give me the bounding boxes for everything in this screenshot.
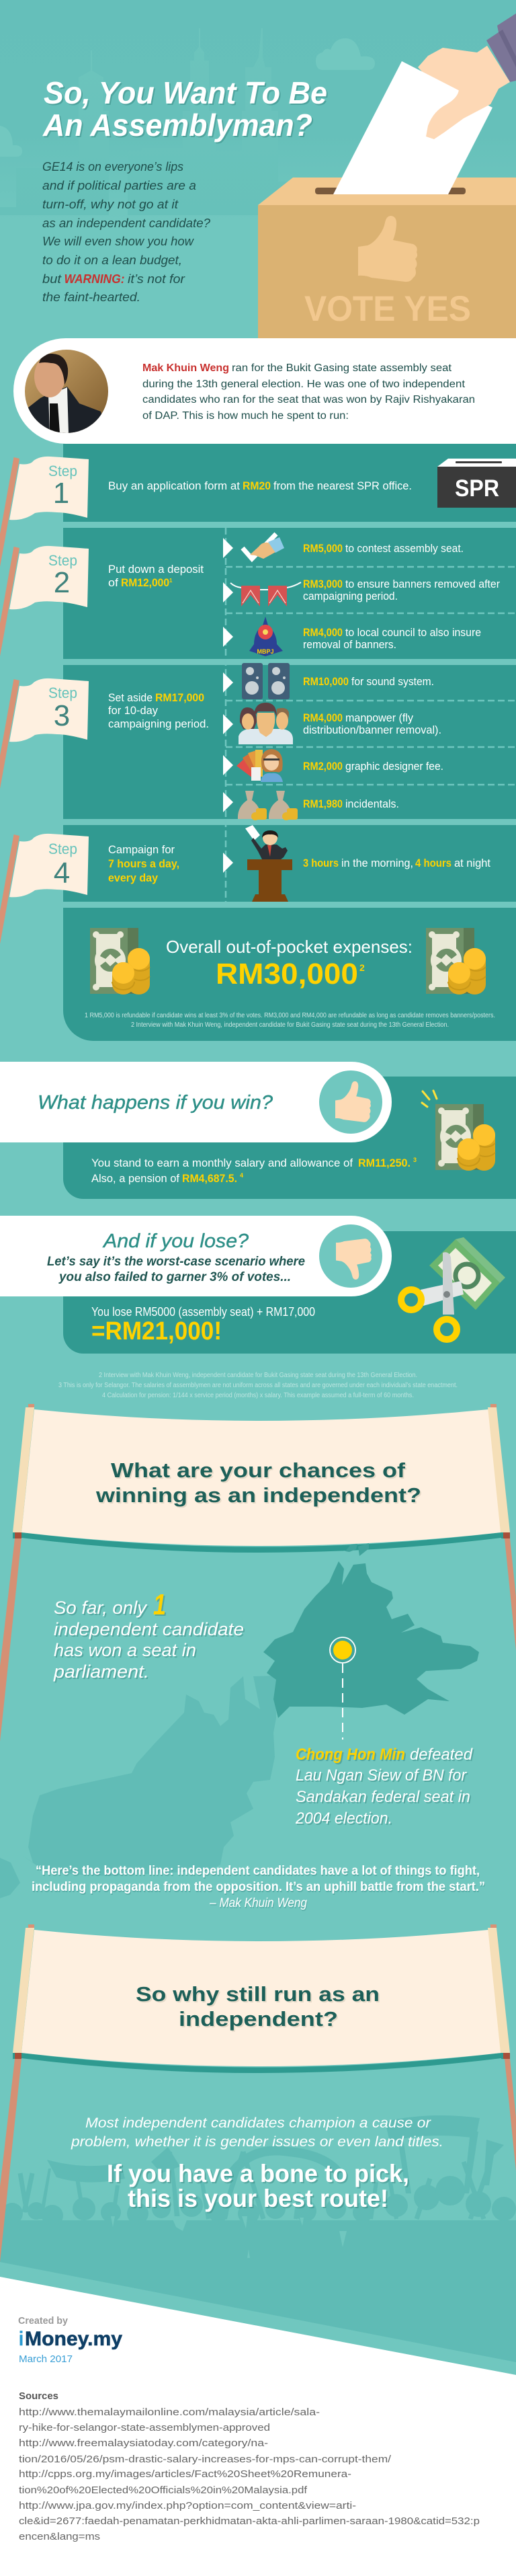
icon: money and coins right bbox=[426, 928, 486, 994]
text: bone to pick: this is your best route! bbox=[128, 2185, 388, 2212]
lose heading: And if you lose? bbox=[102, 1231, 249, 1252]
win text bbox=[91, 1157, 417, 1185]
text: Chong Hon Min: defeated bbox=[410, 1746, 473, 1764]
icon: SPR ballot box: SPR bbox=[455, 475, 499, 502]
flag: step 2 bbox=[0, 546, 89, 656]
win text: RM4,687.5. bbox=[182, 1173, 237, 1185]
heading: why still run: independent? bbox=[179, 2007, 338, 2031]
text: champion a cause: Most independent candidates champion a cause or bbox=[85, 2115, 431, 2131]
step 4 text: every day bbox=[108, 871, 159, 884]
text: RM3,000: to ensure banners removed after bbox=[345, 578, 500, 590]
sources: http://cpps.org.my/images/articles/Fact%20Sheet%20Remunera- bbox=[19, 2468, 351, 2480]
candidate description bbox=[142, 362, 475, 422]
logo: iMoney.my: i bbox=[19, 2328, 24, 2350]
banner: why still run bbox=[0, 1924, 516, 2262]
text: RM4,000 manpower: manpower (fly bbox=[345, 711, 413, 724]
candidate photo bbox=[25, 350, 109, 437]
text: Chong Hon Min bbox=[295, 1746, 473, 1828]
sources: Sources bbox=[19, 2390, 58, 2402]
lose subheading: Let’s say it’s the worst-case scenario where bbox=[47, 1255, 305, 1269]
quote: “Here’s the bottom line: independent candidates have a lot of things to fight, bbox=[36, 1864, 480, 1878]
step 4 detail bbox=[303, 857, 490, 869]
intro paragraph: turn-off, why not go at it bbox=[42, 198, 179, 211]
text: RM3,000 bbox=[303, 578, 500, 602]
step 4 detail: in the morning, bbox=[341, 857, 413, 869]
map: west Malaysia bbox=[0, 1676, 276, 1898]
lose amount text: You lose RM5000 (assembly seat) + RM17,000 bbox=[91, 1305, 315, 1319]
icon: scissors cutting money bbox=[401, 1237, 505, 1339]
candidate description: during the 13th general election. He was one of two independent bbox=[142, 379, 466, 390]
step 2 text: of bbox=[108, 576, 118, 589]
panel: step 1 bbox=[63, 444, 516, 522]
flag: step 3 bbox=[0, 678, 89, 789]
flag: step 3: 3 bbox=[54, 699, 70, 732]
icon: thumbs up on box bbox=[358, 216, 417, 282]
banner: chances of winning bbox=[0, 1404, 516, 1742]
text: RM10,000: RM10,000 bbox=[303, 675, 349, 688]
text: only one independent: 1 bbox=[153, 1588, 166, 1621]
win text: You stand to earn a monthly salary and allowance of bbox=[91, 1157, 353, 1169]
text: Chong Hon Min: Lau Ngan Siew of BN for bbox=[296, 1766, 467, 1785]
step 2 text: 1 bbox=[169, 578, 173, 584]
footnotes bbox=[85, 1012, 495, 1029]
text: RM4,000 council: RM4,000 bbox=[303, 626, 343, 639]
intro paragraph: to do it on a lean budget, bbox=[42, 253, 182, 267]
credit block bbox=[18, 2315, 122, 2365]
text: Chong Hon Min: 2004 election. bbox=[295, 1809, 392, 1828]
lose pill bbox=[0, 1216, 392, 1296]
text: Chong Hon Min: Sandakan federal seat in bbox=[296, 1788, 470, 1806]
quote: including propaganda from the opposition. It’s an uphill battle from the start.” bbox=[32, 1880, 485, 1894]
sources: http://www.jpa.gov.my/index.php?option=com_content&view=arti- bbox=[19, 2500, 356, 2511]
map: east Malaysia bbox=[263, 1543, 479, 1718]
lose subheading: you also failed to garner 3% of votes... bbox=[58, 1270, 291, 1284]
text: RM1,980: RM1,980 bbox=[303, 797, 343, 810]
icon: bunting bbox=[230, 582, 301, 607]
cloud right bbox=[316, 38, 375, 70]
text: bone to pick bbox=[107, 2160, 409, 2212]
quote bbox=[32, 1864, 485, 1910]
panel: step 3 bbox=[63, 665, 516, 819]
text: only one independent: So far, only bbox=[54, 1598, 148, 1618]
sources: http://www.freemalaysiatoday.com/category/na- bbox=[19, 2437, 268, 2449]
flag: step 1 bbox=[0, 457, 89, 567]
text: RM1,980 bbox=[303, 797, 399, 810]
text: RM10,000: for sound system. bbox=[351, 675, 434, 688]
lose amount text bbox=[91, 1305, 315, 1345]
intro paragraph: as an independent candidate? bbox=[42, 217, 210, 230]
sources: tion/2016/05/26/psm-drastic-salary-increases-for-mps-can-corrupt-them/ bbox=[19, 2454, 392, 2465]
box top face bbox=[258, 178, 516, 205]
map pin with dashed line bbox=[330, 1637, 355, 1740]
text: RM3,000: campaigning period. bbox=[303, 590, 398, 602]
step flags bbox=[0, 457, 89, 944]
text: RM3,000: RM3,000 bbox=[303, 578, 343, 590]
footnotes 2-4: 3 This is only for Selangor. The salaries of assemblymen are not uniform across all states and are governed under each individual’s state enactment. bbox=[58, 1382, 458, 1389]
icon: candidate at podium bbox=[245, 825, 292, 902]
flag: step 3: Step bbox=[48, 685, 77, 701]
icon: sleeve cuff bbox=[486, 13, 516, 82]
icon: thumb bbox=[426, 74, 499, 139]
intro paragraph: it’s not for bbox=[128, 272, 185, 286]
flag: step 4: Step bbox=[48, 841, 77, 857]
vote yes label: VOTE YES bbox=[304, 289, 471, 329]
intro paragraph: but bbox=[42, 272, 62, 286]
sources: ry-hike-for-selangor-state-assemblymen-approved bbox=[19, 2422, 270, 2433]
heading: why still run: So why still run as an bbox=[136, 1982, 380, 2006]
text: only one independent bbox=[53, 1588, 244, 1682]
panel: if you lose bbox=[0, 1216, 516, 1354]
text: Chong Hon Min: Chong Hon Min bbox=[296, 1746, 405, 1764]
text: RM5,000: RM5,000 bbox=[303, 542, 343, 555]
lose amount text: =RM21,000! bbox=[91, 1317, 222, 1345]
flag: step 4: 4 bbox=[54, 857, 70, 890]
step 4 detail: 3 hours bbox=[303, 857, 339, 869]
panel: step 4 bbox=[63, 825, 516, 902]
icon: money win bbox=[422, 1091, 495, 1171]
dashed dividers bbox=[226, 528, 516, 902]
date: March 2017 bbox=[19, 2353, 73, 2365]
text: RM4,000 council: to local council to also insure bbox=[345, 626, 481, 639]
candidate description: of DAP. This is how much he spent to run: bbox=[142, 410, 349, 422]
panel: total expenses bbox=[63, 908, 516, 1041]
flag: step 2: Step bbox=[48, 552, 77, 569]
intro paragraph: GE14 is on everyone’s lips bbox=[42, 160, 183, 173]
step 2 text: RM12,000 bbox=[121, 576, 169, 589]
icon: money bags bbox=[238, 791, 298, 820]
icon: money and coins left bbox=[90, 928, 150, 994]
step 1 text: from the nearest SPR office. bbox=[273, 479, 412, 492]
text: RM4,000 manpower: distribution/banner removal). bbox=[303, 724, 441, 736]
text: RM2,000 bbox=[303, 760, 443, 773]
text: RM5,000 bbox=[303, 542, 464, 555]
title: An Assemblyman? bbox=[42, 108, 312, 143]
text: RM4,000 council: removal of banners. bbox=[303, 638, 396, 651]
step 3 text: for 10-day bbox=[108, 704, 158, 717]
box front bbox=[258, 205, 516, 338]
panel: step 2 bbox=[63, 528, 516, 659]
text: champion a cause: problem, whether it is gender issues or even land titles. bbox=[71, 2134, 443, 2150]
lose subheading bbox=[47, 1255, 305, 1284]
step 4 text bbox=[108, 843, 179, 884]
step 1 text: RM20 bbox=[243, 479, 271, 492]
icon: SPR ballot box bbox=[437, 459, 516, 508]
text: RM2,000: RM2,000 bbox=[303, 760, 343, 773]
step 1 text bbox=[108, 479, 412, 492]
sources: tion%20of%20Elected%20Officials%20in%20Malaysia.pdf bbox=[19, 2485, 308, 2496]
step 3 text bbox=[108, 691, 209, 730]
panel: if you win bbox=[0, 1062, 516, 1199]
win circle with thumbs up bbox=[319, 1070, 382, 1134]
win text: RM11,250. bbox=[358, 1157, 411, 1169]
text: RM10,000 bbox=[303, 675, 434, 688]
text: RM5,000: to contest assembly seat. bbox=[345, 542, 464, 555]
slot bbox=[315, 188, 466, 194]
icon: speakers bbox=[242, 663, 290, 699]
sources: encen&lang=ms bbox=[19, 2531, 100, 2542]
intro paragraph: the faint-hearted. bbox=[42, 290, 140, 304]
intro paragraph bbox=[42, 160, 210, 304]
total heading: Overall out-of-pocket expenses: bbox=[166, 937, 413, 957]
hero sky bbox=[0, 0, 516, 222]
intro paragraph: and if political parties are a bbox=[42, 179, 196, 192]
step 3 text: RM17,000 bbox=[155, 691, 204, 704]
intro paragraph: We will even show you how bbox=[42, 235, 194, 248]
heading: why still run bbox=[136, 1982, 380, 2031]
icon: people bbox=[239, 703, 293, 744]
win text: 4 bbox=[240, 1172, 243, 1179]
win heading: What happens if you win? bbox=[38, 1092, 273, 1114]
win text: 3 bbox=[413, 1157, 417, 1163]
cloud left bbox=[0, 126, 22, 157]
arrows bbox=[223, 538, 233, 873]
step 3 text: Set aside bbox=[108, 691, 153, 704]
flag: step 4 bbox=[0, 834, 89, 944]
heading: chances of winning: winning as an independent? bbox=[95, 1483, 421, 1507]
text: only one independent: independent candidate bbox=[54, 1619, 244, 1639]
intro paragraph: WARNING: bbox=[64, 272, 125, 286]
text: RM4,000 council bbox=[303, 626, 481, 651]
sources bbox=[19, 2390, 480, 2542]
candidate description: candidates who ran for the seat that was won by Rajiv Rishyakaran bbox=[142, 394, 475, 405]
sources: http://www.themalaymailonline.com/malaysia/article/sala- bbox=[19, 2407, 320, 2418]
heading: chances of winning bbox=[95, 1458, 421, 1507]
footnotes 2-4 bbox=[58, 1372, 458, 1399]
candidate description: Mak Khuin Weng bbox=[142, 362, 229, 374]
total amount: RM30,000 bbox=[216, 958, 358, 990]
footnotes: 2 Interview with Mak Khuin Weng, independent candidate for Bukit Gasing state seat during the 13th General Election. bbox=[131, 1021, 449, 1029]
candidate description: ran for the Bukit Gasing state assembly seat bbox=[232, 362, 452, 374]
step 1 text: Buy an application form at bbox=[108, 479, 240, 492]
icon: hand bbox=[418, 46, 510, 108]
text: RM2,000: graphic designer fee. bbox=[345, 760, 443, 773]
step 4 text: 7 hours a day, bbox=[108, 857, 179, 870]
flag: step 1: Step bbox=[48, 463, 77, 479]
text: only one independent: has won a seat in bbox=[54, 1640, 196, 1660]
icon: check with hand bbox=[243, 534, 284, 559]
sources: cle&id=2677:faedah-penamatan-perkhidmatan-akta-ahli-parlimen-saraan-1980&catid=532:p bbox=[19, 2515, 480, 2527]
text: RM4,000 manpower bbox=[303, 711, 441, 736]
win text: Also, a pension of bbox=[91, 1173, 179, 1185]
heading: chances of winning: What are your chances of bbox=[111, 1458, 406, 1482]
title: So, You Want To Be bbox=[44, 75, 327, 110]
win pill bbox=[0, 1062, 392, 1142]
footnotes 2-4: 4 Calculation for pension: 1/144 x service period (months) x salary. This example assumed a full-term of 60 months. bbox=[102, 1392, 414, 1399]
quote: – Mak Khuin Weng bbox=[209, 1896, 307, 1910]
icon: MBPJ crest: MBPJ bbox=[257, 648, 274, 655]
panel: candidate profile bbox=[13, 338, 516, 444]
icon: MBPJ crest bbox=[249, 617, 283, 656]
lose circle with thumbs down bbox=[319, 1224, 382, 1288]
step 2 text: Put down a deposit bbox=[108, 563, 204, 576]
footnotes 2-4: 2 Interview with Mak Khuin Weng, independent candidate for Bukit Gasing state seat during the 13th General Election. bbox=[99, 1372, 417, 1379]
step 4 text: Campaign for bbox=[108, 843, 175, 856]
text: champion a cause bbox=[71, 2115, 443, 2150]
flag: step 2: 2 bbox=[54, 566, 70, 599]
step 4 detail: at night bbox=[454, 857, 490, 869]
logo: iMoney.my: Money.my bbox=[25, 2328, 122, 2350]
total amount: 2 bbox=[359, 962, 365, 973]
hero skyline bbox=[0, 28, 336, 215]
ballot paper bbox=[333, 61, 492, 194]
flag: step 1: 1 bbox=[53, 477, 69, 510]
step 4 detail: 4 hours bbox=[415, 857, 452, 869]
crowd silhouette bbox=[0, 2115, 516, 2362]
step 3 text: campaigning period. bbox=[108, 717, 209, 730]
step 2 text bbox=[108, 563, 204, 589]
ballot box illustration bbox=[258, 13, 516, 338]
text: bone to pick: If you have a bone to pick, bbox=[107, 2160, 409, 2187]
text: only one independent: parliament. bbox=[53, 1662, 149, 1682]
icon: graphic designer bbox=[236, 749, 283, 782]
created by: Created by bbox=[18, 2315, 69, 2327]
title bbox=[42, 75, 327, 143]
text: RM4,000 manpower: RM4,000 bbox=[303, 711, 343, 724]
text: RM1,980: incidentals. bbox=[345, 797, 399, 810]
